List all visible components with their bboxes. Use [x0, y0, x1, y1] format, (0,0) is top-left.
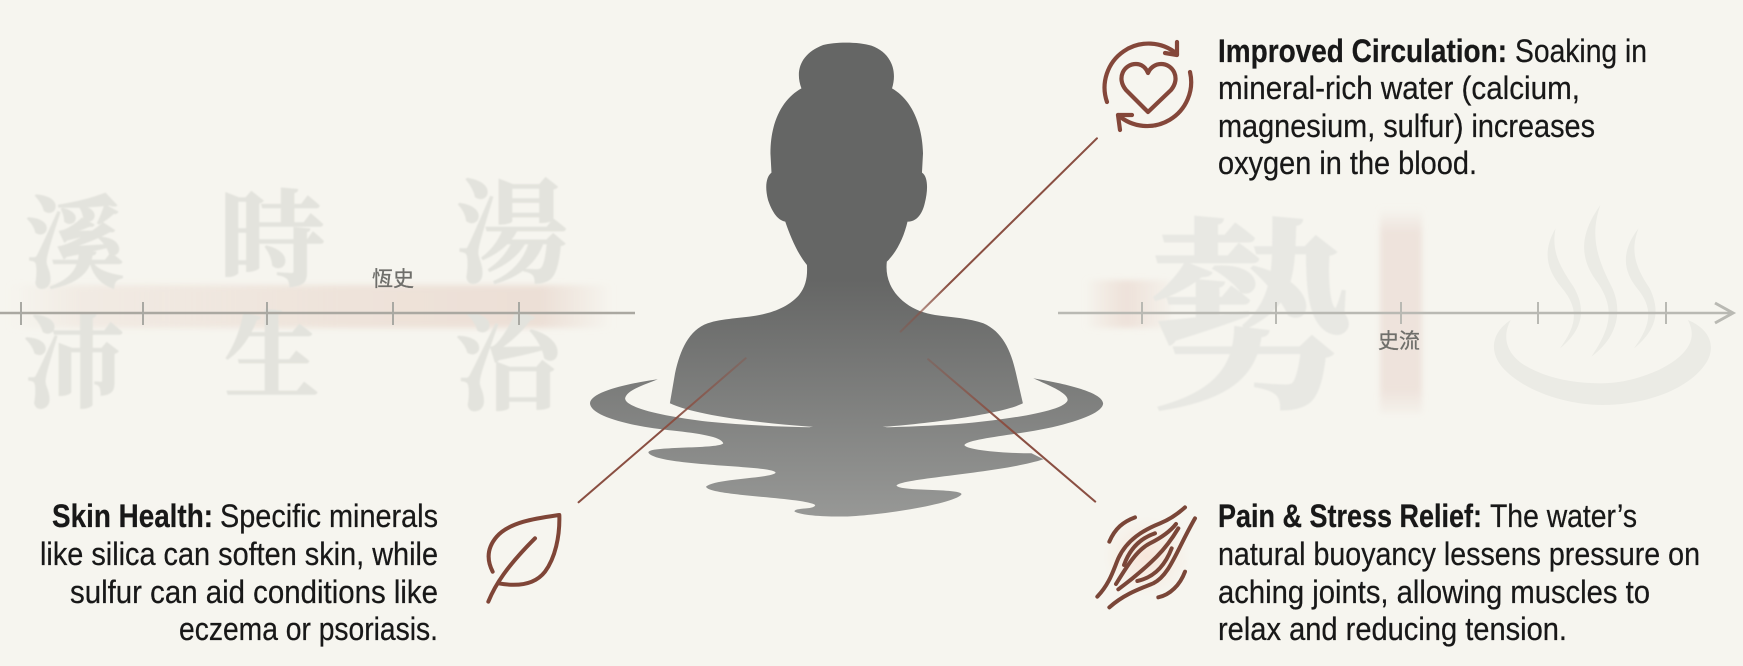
connector: skin — [579, 358, 746, 502]
calligraphy characters: left: 生 — [224, 305, 320, 411]
text block: pain and stress relief: Pain & Stress Relief: — [1218, 498, 1482, 534]
connector lines — [579, 138, 1097, 502]
text block: skin health — [40, 498, 438, 647]
text block: skin health: sulfur can aid conditions like — [70, 574, 438, 610]
calligraphy characters: left: 沛 — [24, 310, 124, 421]
calligraphy characters: left: 溪 — [25, 190, 125, 301]
timeline axis: left — [0, 302, 635, 325]
text block: improved circulation: oxygen in the blood. — [1218, 145, 1477, 181]
text block: pain and stress relief: aching joints, allowing muscles to — [1218, 574, 1650, 610]
brush band: right vertical — [1380, 208, 1422, 414]
text block: pain and stress relief — [1218, 498, 1700, 647]
brush band: right horizontal — [1085, 280, 1170, 328]
calligraphy characters: left: 時 — [219, 183, 325, 300]
silhouette: head and shoulders — [670, 43, 1023, 427]
timeline label: left: 恆史 — [372, 268, 414, 291]
connector: circulation — [901, 138, 1097, 332]
right timeline with brush marks and hot spring symbol — [1058, 205, 1733, 436]
timeline axis: right — [1058, 302, 1733, 324]
text block: skin health: like silica can soften skin, while — [40, 536, 438, 572]
left timeline with brush band — [0, 174, 635, 424]
water ripples — [590, 378, 1103, 517]
text block: skin health: eczema or psoriasis. — [179, 611, 438, 647]
text block: pain and stress relief: relax and reducing tension. — [1218, 611, 1567, 647]
icon: heart with circulation arrows — [1105, 42, 1191, 130]
text block: improved circulation — [1218, 33, 1647, 181]
text block: pain and stress relief: The water’s — [1490, 498, 1637, 534]
figure: bather silhouette in water — [590, 43, 1103, 517]
connector: pain relief — [928, 359, 1095, 502]
calligraphy characters: left — [24, 174, 568, 424]
icon: hot spring symbol — [1494, 205, 1711, 405]
icon: muscle fibres — [1097, 507, 1195, 607]
calligraphy characters: left: 治 — [455, 307, 568, 424]
text block: skin health: Specific minerals — [220, 498, 438, 534]
text block: improved circulation: Improved Circulation: — [1218, 33, 1507, 69]
text block: improved circulation: mineral-rich water (calcium, — [1218, 70, 1580, 106]
timeline label: right: 史流 — [1378, 330, 1420, 353]
text block: improved circulation: Soaking in — [1515, 33, 1647, 69]
text block: pain and stress relief: natural buoyancy lessens pressure on — [1218, 536, 1700, 572]
icon: leaf — [488, 515, 559, 602]
text block: improved circulation: magnesium, sulfur) increases — [1218, 108, 1595, 144]
calligraphy character: right: 勢 — [1148, 209, 1352, 436]
text block: skin health: Skin Health: — [52, 498, 213, 534]
calligraphy characters: left: 湯 — [456, 174, 568, 298]
brush band: left — [8, 285, 613, 328]
